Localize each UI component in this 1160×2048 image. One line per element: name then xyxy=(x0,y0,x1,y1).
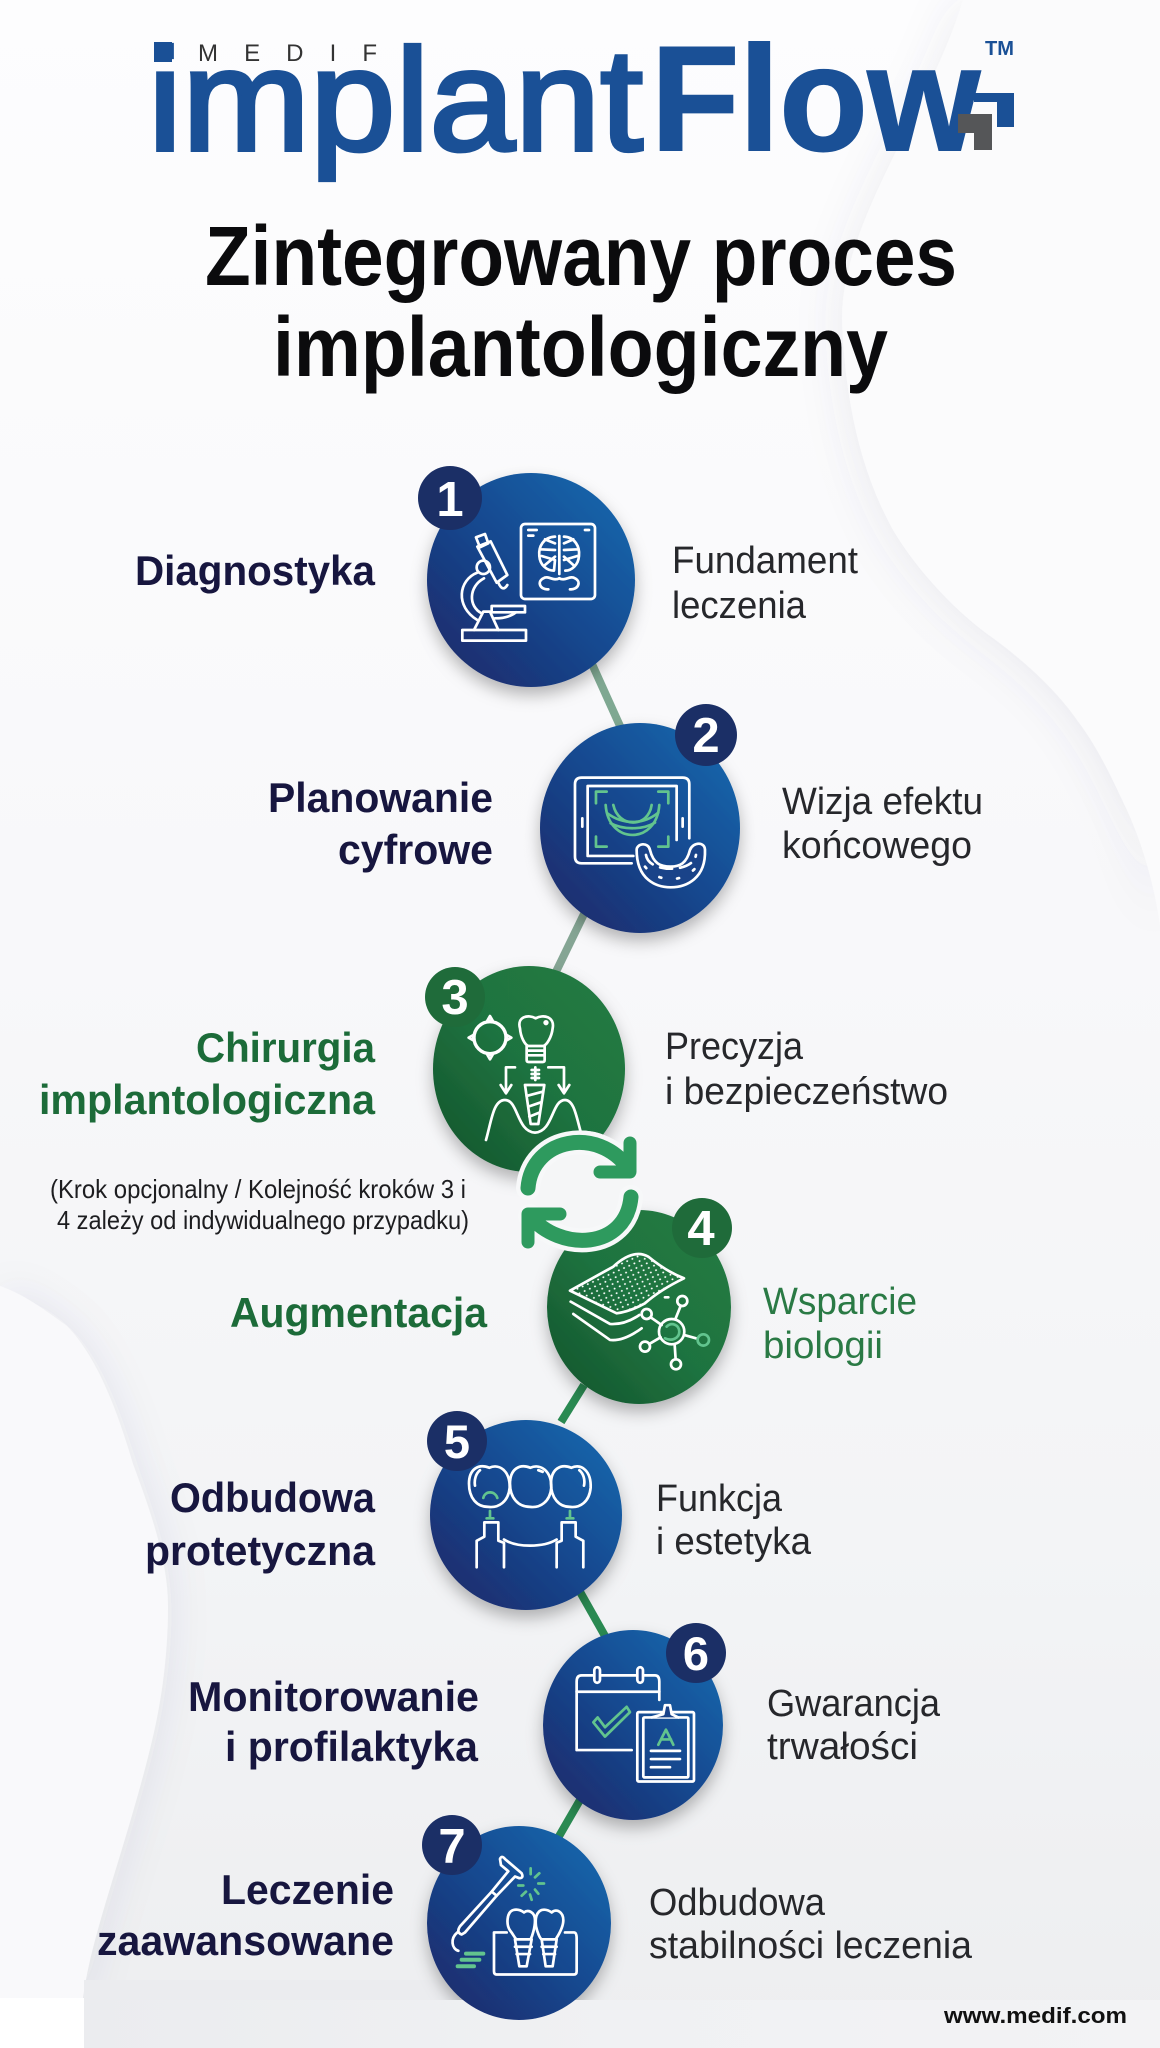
step 3 description: Precyzja xyxy=(665,1026,804,1068)
step 2 description xyxy=(782,781,983,867)
logo arrow mark xyxy=(958,93,1014,150)
step 1 label: Diagnostyka xyxy=(135,547,376,594)
step 5 label: Odbudowa xyxy=(170,1474,376,1521)
logo: implantFlow xyxy=(148,15,1014,182)
step 5 circle xyxy=(430,1420,622,1610)
step 2: Planowanie cyfrowe xyxy=(268,704,983,933)
step 6 circle xyxy=(543,1630,723,1820)
step 7 description xyxy=(649,1882,973,1967)
step 2 description: końcowego xyxy=(782,825,972,867)
step 4 circle xyxy=(547,1210,731,1404)
optional step note: 4 zależy od indywidualnego przypadku) xyxy=(57,1205,469,1235)
step 2 label: cyfrowe xyxy=(338,826,493,873)
step 3 description: i bezpieczeństwo xyxy=(665,1071,948,1113)
icon: dental bridge xyxy=(469,1466,591,1567)
step 5 description xyxy=(656,1478,812,1563)
step 7 description: Odbudowa xyxy=(649,1882,826,1924)
step 3 label xyxy=(39,1024,376,1123)
title: Zintegrowany proces xyxy=(205,209,957,303)
icon: microscope and x-ray xyxy=(462,524,595,641)
step 7 label: Leczenie xyxy=(221,1866,394,1913)
step 4 badge xyxy=(672,1198,732,1258)
logo square xyxy=(154,42,172,62)
step 2 label: Planowanie xyxy=(268,774,493,821)
step 6 description: trwałości xyxy=(767,1726,918,1768)
step 5 description: Funkcja xyxy=(656,1478,783,1520)
connectors xyxy=(552,664,620,1838)
step 6 label xyxy=(188,1673,479,1770)
step 4 description: biologii xyxy=(763,1325,883,1367)
step 1 circle xyxy=(427,473,635,687)
step 6 label: Monitorowanie xyxy=(188,1673,479,1720)
step 1 badge xyxy=(418,466,482,530)
step 3 label: Chirurgia xyxy=(196,1024,376,1071)
step 7 label xyxy=(97,1866,394,1964)
optional step note xyxy=(50,1174,469,1235)
step 7 badge xyxy=(422,1815,482,1875)
step 6: Monitorowanie i profilaktyka xyxy=(188,1623,941,1820)
step 7 label: zaawansowane xyxy=(97,1917,394,1964)
step 5 description: i estetyka xyxy=(656,1521,812,1563)
optional step note: (Krok opcjonalny / Kolejność kroków 3 i xyxy=(50,1174,466,1204)
logo MEDIF wordmark: MEDIF xyxy=(198,40,377,67)
step 4: Augmentacja xyxy=(230,1198,917,1404)
icon: membrane and molecule xyxy=(570,1254,709,1369)
website url: www.medif.com xyxy=(943,2003,1127,2028)
step 4 badge: 4 xyxy=(687,1202,715,1256)
step 2 label xyxy=(268,774,493,873)
icon: dental scaler and implants xyxy=(453,1857,577,1974)
step 6 description xyxy=(767,1683,941,1768)
step 2 circle xyxy=(540,723,740,933)
step 5 badge xyxy=(427,1411,487,1471)
step 1 description: Fundament xyxy=(672,540,858,582)
step 7 badge: 7 xyxy=(438,1820,466,1874)
step 6 badge: 6 xyxy=(683,1627,709,1680)
step 1 description: leczenia xyxy=(672,585,807,627)
step 3 badge xyxy=(425,967,485,1027)
step 2 badge: 2 xyxy=(692,709,720,763)
step 3 circle xyxy=(433,966,625,1172)
step 6 label: i profilaktyka xyxy=(225,1723,479,1770)
step 4 description xyxy=(763,1281,917,1367)
step 1: Diagnostyka xyxy=(135,466,858,687)
logo trademark: TM xyxy=(985,38,1014,60)
step 3 label: implantologiczna xyxy=(39,1076,376,1123)
step 7 circle xyxy=(418,1825,620,2020)
step 5: Odbudowa protetyczna xyxy=(145,1411,812,1610)
step 4 label: Augmentacja xyxy=(230,1289,488,1336)
step 1 badge: 1 xyxy=(436,473,464,527)
step 7 description: stabilności leczenia xyxy=(649,1925,973,1967)
step 1 description xyxy=(672,540,858,627)
step 6 description: Gwarancja xyxy=(767,1683,941,1725)
icon: calendar and clipboard xyxy=(577,1667,694,1781)
icon: implant surgery xyxy=(469,1016,583,1140)
logo implant word: implant xyxy=(148,19,643,181)
title: implantologiczny xyxy=(273,300,888,394)
logo Flow word: Flow xyxy=(651,15,981,182)
step 5 label: protetyczna xyxy=(145,1527,376,1574)
step 2 badge xyxy=(675,704,737,766)
step 2 description: Wizja efektu xyxy=(782,781,983,823)
step 3: Chirurgia implantologiczna xyxy=(39,966,948,1172)
step 3 badge: 3 xyxy=(441,971,469,1025)
step 3 description xyxy=(665,1026,948,1113)
step 4 description: Wsparcie xyxy=(763,1281,917,1323)
step 6 badge xyxy=(666,1623,726,1683)
icon: cycle arrows between steps 3 and 4 xyxy=(526,1131,636,1247)
icon: digital tablet and dental guide xyxy=(575,778,705,887)
step 5 label xyxy=(145,1474,376,1574)
step 5 badge: 5 xyxy=(444,1415,470,1468)
step 7: Leczenie zaawansowane xyxy=(98,1815,972,2020)
title xyxy=(205,209,957,394)
